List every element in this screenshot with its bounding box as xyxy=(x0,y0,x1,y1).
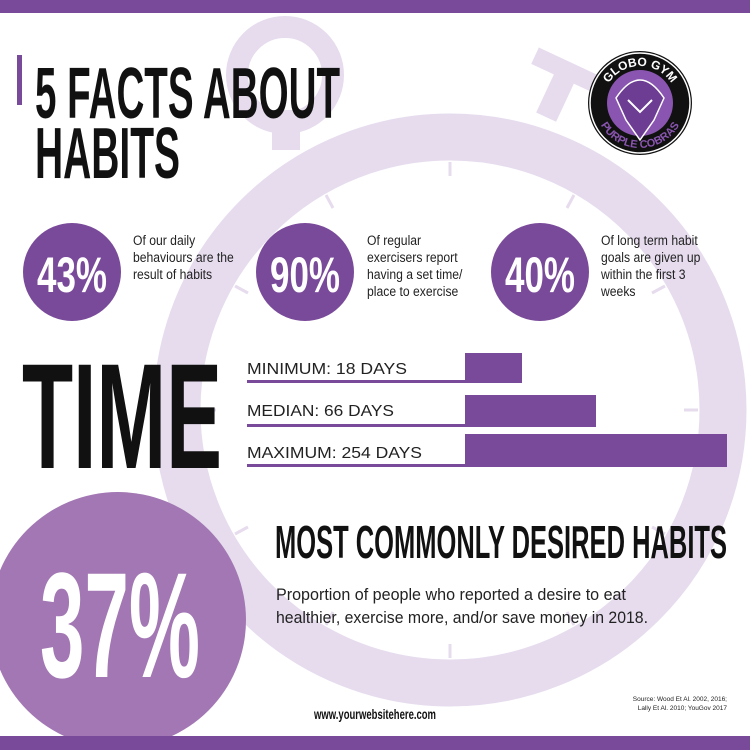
stat: 90% xyxy=(256,223,463,321)
stat: 40% xyxy=(491,223,700,321)
stat: 90%: Of regular xyxy=(367,232,422,248)
stat: 43%: behaviours are the xyxy=(133,249,234,265)
logo: Globo Gym Purple Cobras: PURPLE COBRAS xyxy=(601,121,678,148)
logo: Globo Gym Purple Cobras xyxy=(588,51,692,155)
source note: Lally Et Al. 2010; YouGov 2017 xyxy=(638,705,727,712)
stat: 40%: 40% xyxy=(505,247,575,303)
bar chart: habit formation time: MEDIAN: 66 DAYS xyxy=(247,403,394,420)
big stat: 37%: 37% xyxy=(40,541,200,709)
stat: 90%: place to exercise xyxy=(367,283,458,299)
description text xyxy=(276,585,648,627)
TIME heading: TIME xyxy=(22,332,222,500)
stat: 43%: result of habits xyxy=(133,266,213,282)
stat: 90%: having a set time/ xyxy=(367,266,463,282)
stopwatch background xyxy=(177,27,723,683)
stat: 40%: weeks xyxy=(600,283,636,299)
stat: 90%: exercisers report xyxy=(367,249,458,265)
stat: 40%: goals are given up xyxy=(601,249,700,265)
bar chart: habit formation time xyxy=(247,353,727,467)
title: HABITS xyxy=(35,114,180,194)
bar chart: habit formation time: MAXIMUM: 254 DAYS xyxy=(247,445,422,462)
top bar xyxy=(0,0,750,13)
source note xyxy=(633,696,727,712)
title xyxy=(35,54,340,194)
bottom bar xyxy=(0,736,750,750)
logo: Globo Gym Purple Cobras: GLOBO GYM xyxy=(604,58,678,82)
big stat: 37% xyxy=(0,492,246,748)
stat: 43%: Of our daily xyxy=(133,232,196,248)
stat: 43%: 43% xyxy=(37,247,107,303)
stat: 40%: within the first 3 xyxy=(600,266,686,282)
stat: 43% xyxy=(23,223,234,321)
website: www.yourwebsitehere.com xyxy=(313,706,436,722)
stat: 40%: Of long term habit xyxy=(601,232,698,248)
description text: Proportion of people who reported a desire to eat xyxy=(276,585,626,604)
title: 5 FACTS ABOUT xyxy=(35,54,340,134)
source note: Source: Wood Et Al. 2002, 2016; xyxy=(633,696,727,703)
title accent bar xyxy=(17,55,22,105)
stat: 90%: 90% xyxy=(270,247,340,303)
bar chart: habit formation time: MINIMUM: 18 DAYS xyxy=(247,361,407,378)
description text: healthier, exercise more, and/or save money in 2018. xyxy=(276,608,648,627)
